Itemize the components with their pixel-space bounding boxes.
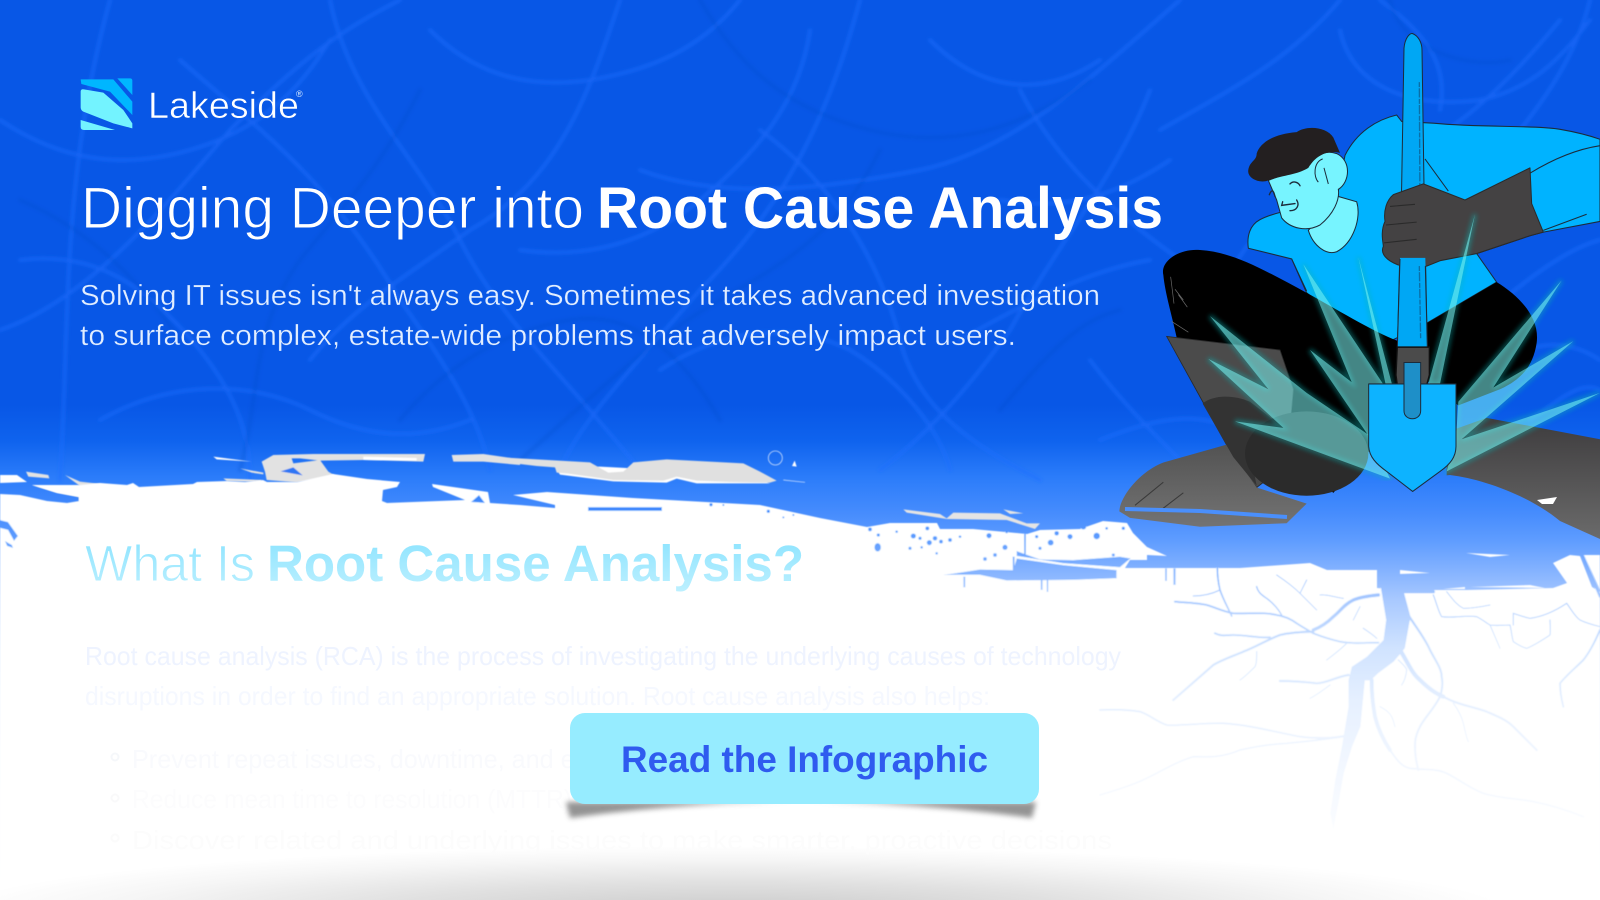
shovel blade <box>1369 362 1456 491</box>
back leg and boot <box>1447 418 1600 543</box>
white fleck on mound <box>1537 497 1557 504</box>
left boot <box>1119 445 1307 527</box>
wordmark: Lakeside <box>148 85 299 126</box>
facial features <box>1269 182 1300 211</box>
title <box>81 176 1163 241</box>
knee shadow <box>1203 397 1280 486</box>
shirt <box>1248 115 1600 343</box>
faded bullet list <box>112 744 1112 855</box>
torn paper: grey and white edge fragments <box>26 451 1040 529</box>
shovel socket <box>1396 347 1429 385</box>
title: light part: Digging Deeper into <box>81 176 584 241</box>
black trousers, left thigh <box>1163 250 1398 493</box>
illustration: person digging with shovel <box>1119 33 1600 620</box>
figure body <box>1119 33 1600 543</box>
faded body paragraph <box>85 641 1121 711</box>
faded body paragraph: Root cause analysis (RCA) is the process of investigating the underlying causes of technology <box>85 641 1121 671</box>
burst glow <box>1208 214 1600 479</box>
faded body paragraph: disruptions in order to find an appropriate solution. Root cause analysis also helps: <box>85 681 990 711</box>
bullet 2: Reduce mean time to resolution (MTTR) <box>132 784 572 814</box>
neck <box>1308 196 1358 253</box>
registered mark: ® <box>296 89 303 99</box>
ear detail <box>1315 159 1328 184</box>
glove <box>1382 168 1543 266</box>
intro paragraph <box>80 280 1100 352</box>
intro paragraph: Solving IT issues isn't always easy. Sometimes it takes advanced investigation <box>80 280 1100 312</box>
button body <box>570 713 1039 804</box>
bottom grey shadow <box>0 840 1600 900</box>
lower handle over glove <box>1397 258 1427 348</box>
button label: Read the Infographic <box>621 739 988 780</box>
burst spikes <box>1208 214 1600 479</box>
call-to-action button <box>566 713 1039 818</box>
section heading <box>85 535 804 592</box>
face and ear <box>1268 152 1347 229</box>
bullet 1: Prevent repeat issues, downtime, and employee frustration <box>132 744 789 774</box>
lower left leg <box>1167 336 1293 487</box>
soil mound <box>1120 475 1600 620</box>
title: bold part: Root Cause Analysis <box>597 176 1163 241</box>
fabric scratch marks <box>1171 277 1188 332</box>
white ground layer with torn edge and root cut-outs <box>0 473 1600 804</box>
hair <box>1248 128 1340 181</box>
heading: light part: What Is <box>85 535 255 592</box>
shovel handle <box>1397 33 1427 348</box>
intro paragraph: to surface complex, estate-wide problems that adversely impact users. <box>80 320 1016 352</box>
bullet 3: Discover related and underlying issues to make smarter, proactive decisions <box>132 825 1112 855</box>
icon: Lakeside mark <box>81 78 132 130</box>
background: root texture <box>0 0 1600 480</box>
blue streak across boot <box>1125 509 1287 517</box>
black trousers, right thigh <box>1427 282 1537 405</box>
logo: Lakeside <box>81 78 303 130</box>
heading: bold part: Root Cause Analysis? <box>267 535 804 592</box>
button shadow <box>566 802 1036 818</box>
